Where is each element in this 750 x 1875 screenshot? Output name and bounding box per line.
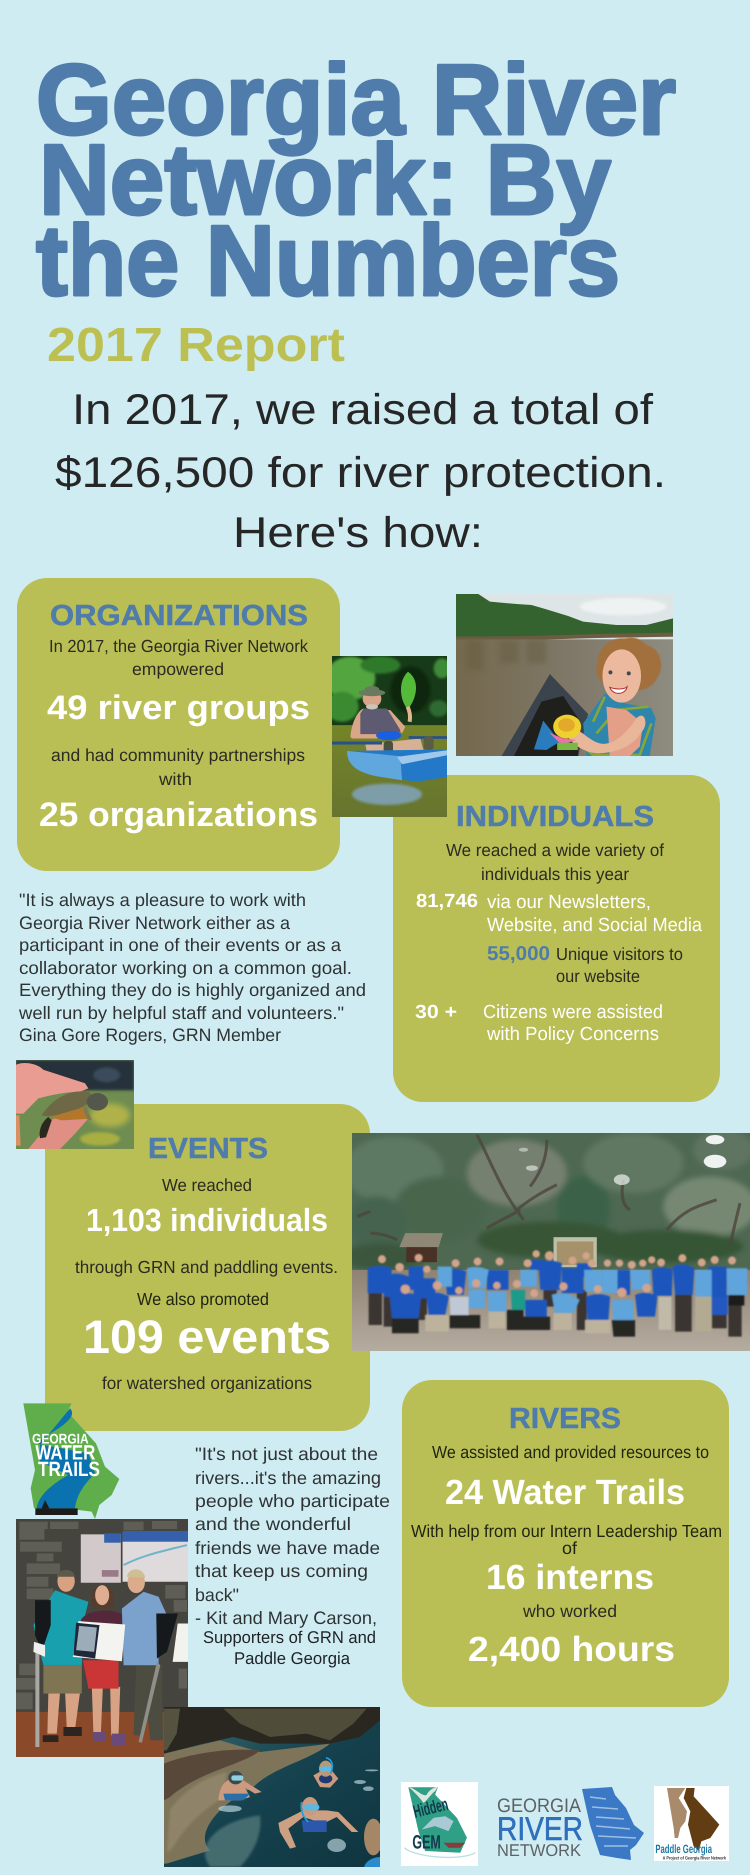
text: partnerships: and had community partnerships — [51, 745, 305, 765]
quote: Gina Gore Rogers — [18, 890, 366, 1045]
photo: group of paddlers under oak trees — [352, 1133, 750, 1351]
text: partnerships — [51, 745, 305, 789]
stat: 81,746: 81,746 — [416, 891, 478, 912]
stat: 24 water trails: 24 Water Trails — [445, 1473, 685, 1512]
title: Network: By — [39, 124, 611, 236]
quote: Gina Gore Rogers: "It is always a pleasure to work with — [19, 890, 306, 910]
text: empowered — [49, 636, 308, 679]
certificate — [73, 1621, 125, 1661]
stat: 30+: 30 + — [415, 1002, 457, 1023]
text: we also promoted: We also promoted — [137, 1289, 269, 1309]
paddles — [35, 1600, 51, 1652]
stat: 2,400 hours: 2,400 hours — [468, 1630, 675, 1669]
stat: 1,103 individuals: 1,103 individuals — [86, 1202, 328, 1238]
heading: individuals: INDIVIDUALS — [456, 801, 654, 833]
logo: Georgia Water Trails: GEORGIA — [32, 1431, 89, 1447]
panel: rivers — [402, 1380, 729, 1707]
text: assisted: We assisted and provided resources to — [432, 1442, 709, 1462]
stat: 30+ — [415, 1002, 663, 1045]
quote: Kit and Mary Carson: Paddle Georgia — [234, 1649, 351, 1668]
logo: Georgia River Network: GEORGIA — [497, 1795, 581, 1817]
stat: 55,000: Unique visitors to — [556, 944, 683, 964]
text: empowered: empowered — [132, 659, 224, 679]
panel: organizations — [17, 578, 340, 871]
stat: 30+: Citizens were assisted — [483, 1002, 663, 1023]
logo: Hidden Gem: Hidden — [411, 1794, 450, 1822]
quote: Kit and Mary Carson: rivers...it's the amazing — [195, 1468, 381, 1488]
logo: Hidden Gem — [401, 1782, 478, 1866]
stat: 30+: with Policy Concerns — [486, 1024, 659, 1045]
quote: Kit and Mary Carson: that keep us coming — [195, 1561, 368, 1581]
text: wide variety: individuals this year — [481, 864, 629, 884]
title: Georgia River — [36, 44, 676, 156]
logo: Georgia Water Trails: TRAILS — [38, 1458, 100, 1481]
quote: Kit and Mary Carson: back" — [195, 1585, 239, 1605]
snorkeler left — [218, 1779, 262, 1800]
quote: Gina Gore Rogers: Gina Gore Rogers, GRN Member — [19, 1025, 281, 1045]
text: intern leadership team — [411, 1521, 722, 1558]
stat: 49 river groups: 49 river groups — [47, 689, 310, 727]
photo: turtle on hand — [16, 1060, 134, 1149]
stat: 81,746 — [416, 891, 702, 936]
text: intern leadership team: With help from our Intern Leadership Team — [411, 1521, 722, 1541]
logo: Georgia River Network — [497, 1787, 644, 1860]
quote: Kit and Mary Carson — [195, 1444, 390, 1668]
heading: rivers: RIVERS — [509, 1403, 621, 1435]
heading: organizations: ORGANIZATIONS — [50, 600, 308, 632]
text: partnerships: with — [158, 769, 192, 789]
quote: Gina Gore Rogers: Everything they do is highly organized and — [19, 980, 366, 1000]
title: the Numbers — [36, 205, 620, 317]
photo: man in kayak — [332, 656, 447, 817]
icon: river-textured Georgia map — [582, 1787, 644, 1860]
logo: Georgia River Network: NETWORK — [497, 1841, 582, 1860]
photo: child in canoe on river — [456, 594, 673, 756]
quote: Gina Gore Rogers: Georgia River Network either as a — [19, 913, 291, 933]
person 2 — [92, 1687, 120, 1735]
intro text — [55, 386, 666, 557]
text: who worked: who worked — [522, 1601, 617, 1621]
quote: Kit and Mary Carson: - Kit and Mary Carson, — [195, 1608, 377, 1628]
stat: 55,000 — [487, 943, 683, 986]
snorkeler right — [313, 1770, 338, 1788]
stat: 25 organizations: 25 organizations — [39, 796, 318, 834]
text: wide variety: We reached a wide variety of — [446, 840, 664, 860]
photo: snorkelers in cave pool — [164, 1707, 380, 1867]
quote: Kit and Mary Carson: people who participate — [195, 1491, 390, 1511]
quote: Kit and Mary Carson: Supporters of GRN and — [203, 1628, 376, 1647]
text: we reached: We reached — [162, 1175, 252, 1195]
intro text: Here's how: — [233, 509, 483, 557]
stat: 16 interns: 16 interns — [486, 1558, 654, 1597]
text: wide variety — [446, 840, 664, 884]
text: empowered: In 2017, the Georgia River Network — [49, 636, 308, 656]
logo: Georgia Water Trails: WATER — [35, 1441, 95, 1464]
quote: Gina Gore Rogers: participant in one of their events or as a — [19, 935, 342, 955]
quote: Gina Gore Rogers: well run by helpful staff and volunteers." — [18, 1003, 344, 1023]
stat: 81,746: Website, and Social Media — [487, 915, 702, 936]
photo: three people with proclamation and paddles — [16, 1519, 188, 1757]
stat: 55,000: our website — [556, 966, 640, 986]
quote: Kit and Mary Carson: and the wonderful — [195, 1514, 351, 1534]
subtitle: 2017 Report: 2017 Report — [47, 319, 345, 372]
quote: Kit and Mary Carson: friends we have made — [195, 1538, 380, 1558]
text: intern leadership team: of — [562, 1538, 577, 1558]
stat: 109 events: 109 events — [83, 1310, 331, 1363]
snorkeler front — [278, 1810, 358, 1849]
quote: Kit and Mary Carson: "It's not just about the — [195, 1444, 378, 1464]
logo: Hidden Gem: GEM — [412, 1831, 441, 1853]
logo: Georgia River Network: RIVER — [497, 1810, 583, 1847]
person 3 — [134, 1665, 163, 1740]
text: watershed organizations: for watershed organizations — [102, 1373, 312, 1393]
heading: events: EVENTS — [148, 1133, 268, 1165]
intro text: $126,500 for river protection. — [55, 449, 666, 497]
person 1 — [47, 1692, 80, 1734]
panel: events — [45, 1104, 370, 1431]
intro text: In 2017, we raised a total of — [72, 386, 654, 434]
text: through events: through GRN and paddling events. — [75, 1257, 338, 1277]
crowd of paddlers — [368, 1250, 747, 1337]
logo: Paddle Georgia — [654, 1786, 729, 1861]
panel: individuals — [393, 775, 720, 1102]
title — [36, 44, 676, 317]
stat: 55,000: 55,000 — [487, 943, 550, 965]
logo: Georgia Water Trails — [23, 1403, 120, 1519]
stat: 81,746: via our Newsletters, — [487, 892, 651, 913]
quote: Gina Gore Rogers: collaborator working on a common goal. — [19, 958, 352, 978]
